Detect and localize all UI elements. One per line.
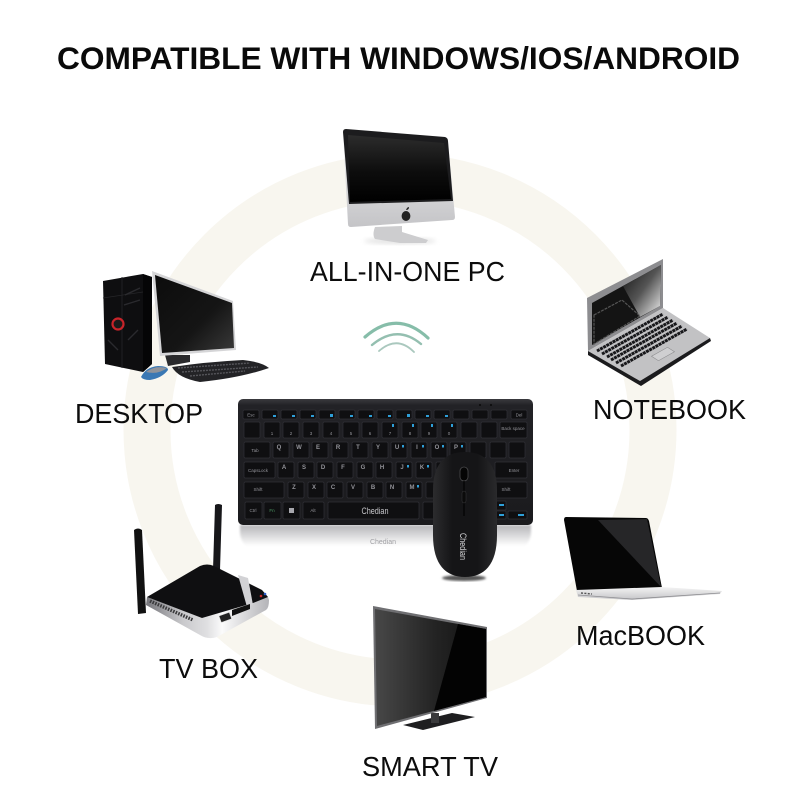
- indicator lights: [479, 404, 492, 406]
- monitor stand: [165, 355, 190, 366]
- aluminium base: [576, 587, 722, 600]
- bottom letter row: X: [312, 485, 316, 491]
- reflected logo: Chedian: [370, 539, 396, 546]
- label: smart TV: SMART TV: [362, 751, 499, 782]
- home row: A: [282, 465, 287, 471]
- QWERTY row: E: [316, 445, 320, 451]
- space row: [245, 501, 527, 519]
- apple logo: [402, 207, 410, 221]
- QWERTY row: P: [454, 445, 458, 451]
- bottom letter row: M: [410, 485, 414, 491]
- QWERTY row: U: [395, 445, 399, 451]
- lid: [587, 259, 663, 351]
- bottom letter row: N: [390, 485, 394, 491]
- label: all-in-one PC: ALL-IN-ONE PC: [310, 256, 505, 287]
- function row: Esc: [247, 412, 255, 418]
- red light: [260, 595, 262, 597]
- device: TV box: [134, 504, 269, 638]
- home row: G: [361, 465, 366, 471]
- QWERTY row: Q: [277, 445, 282, 451]
- home row: [244, 462, 527, 478]
- QWERTY row: Y: [376, 445, 380, 451]
- home row: D: [321, 465, 326, 471]
- bottom letter row: Z: [292, 485, 296, 491]
- label: notebook: NOTEBOOK: [593, 394, 747, 425]
- home row: Enter: [509, 468, 520, 473]
- home row: F: [341, 465, 345, 471]
- function row: Del: [516, 412, 522, 418]
- port block: [232, 604, 250, 616]
- left antenna: [134, 528, 146, 614]
- keyboard body: [238, 399, 533, 525]
- device: all-in-one PC: [343, 129, 455, 244]
- home row: S: [302, 465, 306, 471]
- QWERTY row: I: [416, 445, 418, 451]
- title: COMPATIBLE WITH WINDOWS/IOS/ANDROID: [57, 40, 740, 76]
- label: TV box: TV BOX: [159, 653, 258, 684]
- red power ring: [112, 318, 124, 330]
- monitor body: [343, 129, 455, 227]
- icon: wireless signal: [365, 323, 428, 352]
- label: MacBook: MacBOOK: [576, 620, 706, 651]
- number row: Back space: [501, 426, 525, 431]
- scroll wheel: [460, 467, 468, 481]
- USB port: [219, 612, 232, 623]
- dark reflection: [434, 624, 486, 711]
- function row: [243, 410, 527, 419]
- number row: 6: [369, 431, 372, 436]
- monitor frame: [152, 271, 236, 356]
- space row: Ctrl: [250, 508, 256, 513]
- number row: 1: [271, 431, 274, 436]
- number row: 0: [448, 431, 451, 436]
- keyboard logo: Chedian: [362, 506, 388, 517]
- screen: [348, 135, 451, 202]
- blue light: [264, 593, 266, 595]
- side ports: [581, 593, 592, 594]
- space row: Alt: [310, 508, 316, 513]
- wireless mouse: [433, 452, 497, 581]
- centre button seam: [463, 481, 465, 516]
- home row: J: [400, 465, 404, 471]
- QWERTY row: O: [435, 445, 440, 451]
- tower: [103, 274, 152, 372]
- bottom letter row: C: [331, 485, 336, 491]
- number row: 2: [290, 431, 293, 436]
- home row: K: [420, 465, 425, 471]
- keyboard: [172, 360, 269, 382]
- shadow under the stand: [364, 238, 436, 244]
- mouse logo: Chedian: [457, 533, 468, 560]
- monitor screen: [155, 275, 234, 353]
- side silver stripe: [238, 575, 253, 607]
- black bezel: [343, 129, 453, 204]
- device: desktop computer: [103, 271, 269, 382]
- number row: [244, 422, 527, 438]
- number row: 5: [350, 431, 353, 436]
- number row: 9: [428, 431, 431, 436]
- bottom letter row: [244, 482, 527, 498]
- keyboard rows: [597, 314, 687, 366]
- screen gloss: [598, 519, 661, 587]
- number row: 8: [409, 431, 412, 436]
- bottom letter row: Shift: [253, 487, 263, 492]
- device: notebook: [587, 259, 711, 386]
- bottom letter row: Shift: [501, 487, 511, 492]
- number row: 3: [310, 431, 313, 436]
- mouse shadow: [442, 575, 486, 581]
- stand base: [403, 713, 475, 730]
- stand neck: [431, 713, 439, 723]
- rear antenna: [213, 504, 222, 570]
- device: MacBook: [564, 517, 722, 600]
- QWERTY row: R: [336, 445, 341, 451]
- bottom letter row: V: [351, 485, 355, 491]
- mouse body: [433, 452, 497, 577]
- QWERTY row: Tab: [251, 448, 259, 453]
- panel glass: [375, 609, 486, 726]
- QWERTY row: [244, 442, 525, 458]
- QWERTY row: T: [356, 445, 360, 451]
- lid screen: [592, 265, 661, 345]
- trackpad: [652, 347, 674, 361]
- mouse: [141, 366, 168, 380]
- device: smart TV: [373, 606, 487, 730]
- keyboard reflection: [240, 525, 531, 546]
- stand: [374, 226, 428, 243]
- home row: CapsLock: [248, 468, 269, 473]
- base: [588, 308, 710, 381]
- vents: [150, 601, 193, 620]
- space row: Fn: [269, 508, 275, 513]
- silver chassis: [146, 597, 269, 638]
- label: desktop: DESKTOP: [75, 398, 203, 429]
- number row: 4: [330, 431, 333, 436]
- wireless keyboard: [238, 399, 533, 546]
- cream ring connecting the devices: [147, 177, 653, 683]
- number row: 7: [389, 431, 392, 436]
- QWERTY row: W: [296, 445, 302, 451]
- bottom letter row: B: [371, 485, 376, 491]
- black top: [147, 564, 268, 618]
- home row: H: [380, 465, 384, 471]
- panel frame: [373, 606, 487, 729]
- screen lid: [564, 517, 662, 591]
